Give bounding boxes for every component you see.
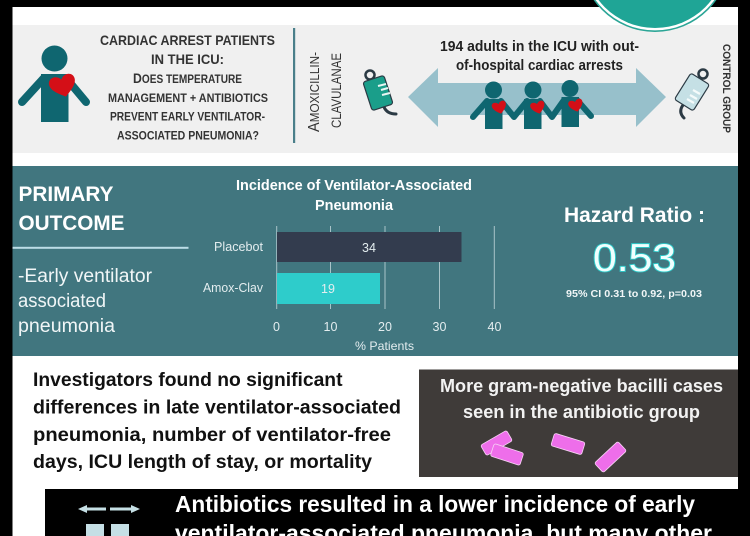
text: population (440, 39, 639, 74)
icon: teal IV bag (363, 70, 396, 114)
text block: secondary findings: days, ICU length of stay, or mortality (33, 452, 372, 473)
bar: amox-clav (277, 273, 380, 304)
heading: study question: ASSOCIATED PNEUMONIA? (117, 130, 259, 142)
heading: study question: CARDIAC ARREST PATIENTS (100, 32, 275, 48)
panel: primary outcome (12, 166, 738, 356)
bar chart: incidence of ventilator-associated pneumonia: 10 (324, 320, 337, 334)
bar chart: incidence of ventilator-associated pneumonia: 20 (378, 320, 392, 334)
bar chart: incidence of ventilator-associated pneumonia: % Patients (355, 339, 414, 353)
text block: secondary findings: pneumonia, number of ventilator-free (33, 425, 391, 446)
heading: study question: IN THE ICU: (151, 51, 224, 67)
icon: bacilli (481, 430, 627, 473)
bar chart: incidence of ventilator-associated pneumonia: 34 (362, 241, 376, 255)
heading: primary outcome (18, 183, 124, 235)
heading: primary outcome: PRIMARY (18, 183, 114, 206)
bar chart: incidence of ventilator-associated pneumonia: 40 (488, 320, 501, 334)
text: population: of-hospital cardiac arrests (456, 58, 623, 74)
panel: gram-negative bacilli (419, 370, 738, 477)
panel: study design (12, 25, 738, 153)
text block: secondary findings (33, 370, 401, 473)
text: population: 194 adults in the ICU with out- (440, 39, 639, 55)
chart title (236, 178, 472, 214)
text: outcome definition (18, 266, 153, 337)
text: outcome definition: -Early ventilator (18, 266, 153, 287)
text block: secondary findings: differences in late ventilator-associated (33, 398, 401, 418)
icon: scales with arrows (78, 505, 140, 536)
heading: study question: DOES TEMPERATURE (133, 70, 242, 86)
icon: patient with heart (22, 46, 86, 122)
text: conclusion (175, 491, 712, 536)
label: control group: CONTROL GROUP (720, 44, 732, 133)
bar chart: incidence of ventilator-associated pneumonia: Amox-Clav (203, 281, 264, 295)
callout: hazard ratio (564, 204, 705, 300)
heading: study question: MANAGEMENT + ANTIBIOTICS (108, 93, 268, 105)
text block: secondary findings: Investigators found no significant (33, 370, 343, 391)
chart title: Incidence of Ventilator-Associated (236, 178, 472, 194)
heading: study question: PREVENT EARLY VENTILATOR- (110, 112, 265, 124)
text: outcome definition: pneumonia (18, 316, 115, 337)
panel: gram-negative bacilli: seen in the antibiotic group (463, 402, 700, 422)
bar chart: incidence of ventilator-associated pneumonia (203, 178, 501, 353)
bar chart: incidence of ventilator-associated pneumonia: 0 (273, 320, 280, 334)
text: conclusion: Antibiotics resulted in a lower incidence of early (175, 491, 695, 517)
icon: three patients holding hands (473, 80, 591, 129)
label: amoxicillin-clavulanae arm: AMOXICILLIN- (306, 52, 323, 132)
heading: study question (100, 32, 275, 142)
chart title: Pneumonia (315, 198, 394, 214)
panel: conclusion (78, 491, 712, 536)
bar chart: incidence of ventilator-associated pneumonia: Placebot (214, 240, 264, 254)
callout: hazard ratio: Hazard Ratio : (564, 204, 705, 227)
callout: hazard ratio: 0.53 (593, 237, 676, 280)
bar chart: incidence of ventilator-associated pneumonia: 30 (433, 320, 446, 334)
bar chart: incidence of ventilator-associated pneumonia: 19 (321, 282, 335, 296)
label: amoxicillin-clavulanae arm: CLAVULANAE (329, 53, 344, 128)
header badge circle (580, 0, 730, 32)
bar: placebo (277, 232, 462, 262)
callout: hazard ratio: 95% CI 0.31 to 0.92, p=0.03 (566, 289, 702, 300)
heading: primary outcome: OUTCOME (18, 212, 124, 235)
label: amoxicillin-clavulanae arm (306, 52, 344, 132)
arrow: double-headed allocation (408, 68, 666, 127)
icon: pale IV bag (674, 70, 710, 118)
panel: gram-negative bacilli: More gram-negative bacilli cases (440, 376, 723, 396)
text: outcome definition: associated (18, 291, 106, 312)
